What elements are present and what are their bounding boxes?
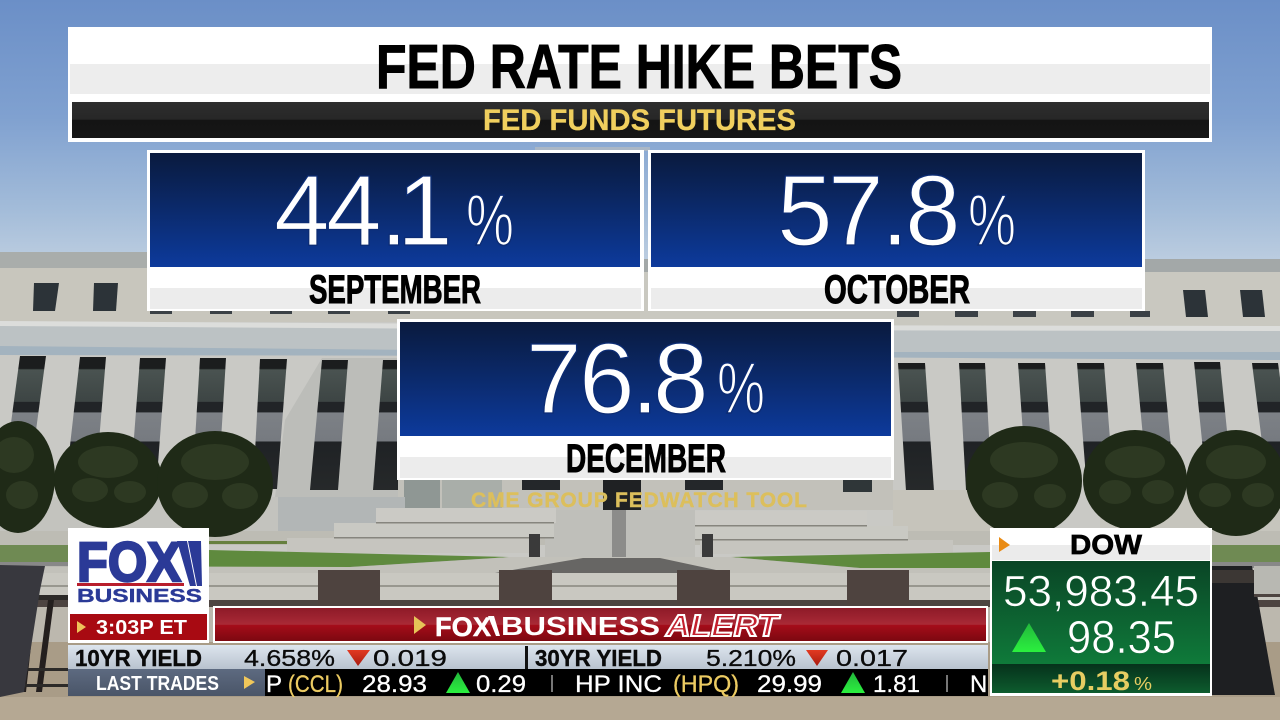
value: 44.1%: % xyxy=(466,181,514,261)
label: December: DECEMBER xyxy=(566,437,726,481)
ticker: treasury yields xyxy=(68,645,988,671)
alert banner: ALERT xyxy=(665,608,781,643)
ticker: last trades: 1.81 xyxy=(873,671,920,698)
dow change xyxy=(1012,611,1176,663)
ticker: treasury yields: 4.658% xyxy=(244,645,335,671)
label: September: SEPTEMBER xyxy=(309,268,481,312)
ticker: last trades: P xyxy=(266,671,282,698)
alert banner: BUSINESS xyxy=(501,611,660,641)
logo: FOX: FOX xyxy=(77,530,181,593)
ticker: treasury yields: 10YR YIELD xyxy=(75,645,202,671)
value: 44.1%: 44.1 xyxy=(274,155,453,267)
ticker: last trades: 29.99 xyxy=(757,671,822,698)
panel: December xyxy=(397,319,894,481)
ticker: last trades: LAST TRADES xyxy=(96,672,219,695)
dow percent: % xyxy=(1134,674,1152,694)
value: 57.8%: % xyxy=(968,181,1016,261)
clock xyxy=(70,614,207,640)
source caption: CME GROUP FEDWATCH TOOL xyxy=(471,489,807,512)
ticker: treasury yields: 0.017 xyxy=(836,645,908,671)
ticker: last trades: (HPQ) xyxy=(673,671,739,698)
value: 76.8%: 76.8 xyxy=(526,323,709,435)
subtitle bar xyxy=(72,102,1209,138)
background: trees xyxy=(0,421,1280,537)
ticker: last trades: HP INC xyxy=(575,671,662,698)
ticker: last trades: N xyxy=(970,671,987,698)
panel: September xyxy=(147,150,644,312)
dow value: 53,983.45 xyxy=(1003,567,1199,616)
clock: 3:03P ET xyxy=(96,616,187,639)
panel: October xyxy=(648,150,1145,312)
value: 76.8%: % xyxy=(717,349,765,429)
title panel xyxy=(68,27,1212,142)
ticker: last trades: 28.93 xyxy=(362,671,427,698)
panel: Dow index: DOW xyxy=(1070,529,1143,560)
ticker: last trades: 0.29 xyxy=(476,671,526,698)
ticker: last trades: (CCL) xyxy=(288,671,343,698)
title heading: FED RATE HIKE BETS xyxy=(376,33,902,102)
alert banner xyxy=(213,606,988,643)
logo: FOX: BUSINESS xyxy=(77,586,202,606)
alert banner: FOX xyxy=(435,612,491,642)
label: October: OCTOBER xyxy=(824,268,970,312)
ticker: last trades xyxy=(68,669,988,698)
ticker: treasury yields: 0.019 xyxy=(373,645,447,671)
value: 57.8%: 57.8 xyxy=(777,155,961,267)
subtitle bar: FED FUNDS FUTURES xyxy=(483,104,796,137)
dow change: 98.35 xyxy=(1067,611,1176,663)
dow percent: +0.18 xyxy=(1051,666,1130,696)
ticker: treasury yields: 5.210% xyxy=(706,645,796,671)
dow percent xyxy=(1051,666,1152,696)
ticker: treasury yields: 30YR YIELD xyxy=(535,645,662,671)
network logo box xyxy=(68,528,209,643)
panel: Dow index xyxy=(990,528,1212,696)
